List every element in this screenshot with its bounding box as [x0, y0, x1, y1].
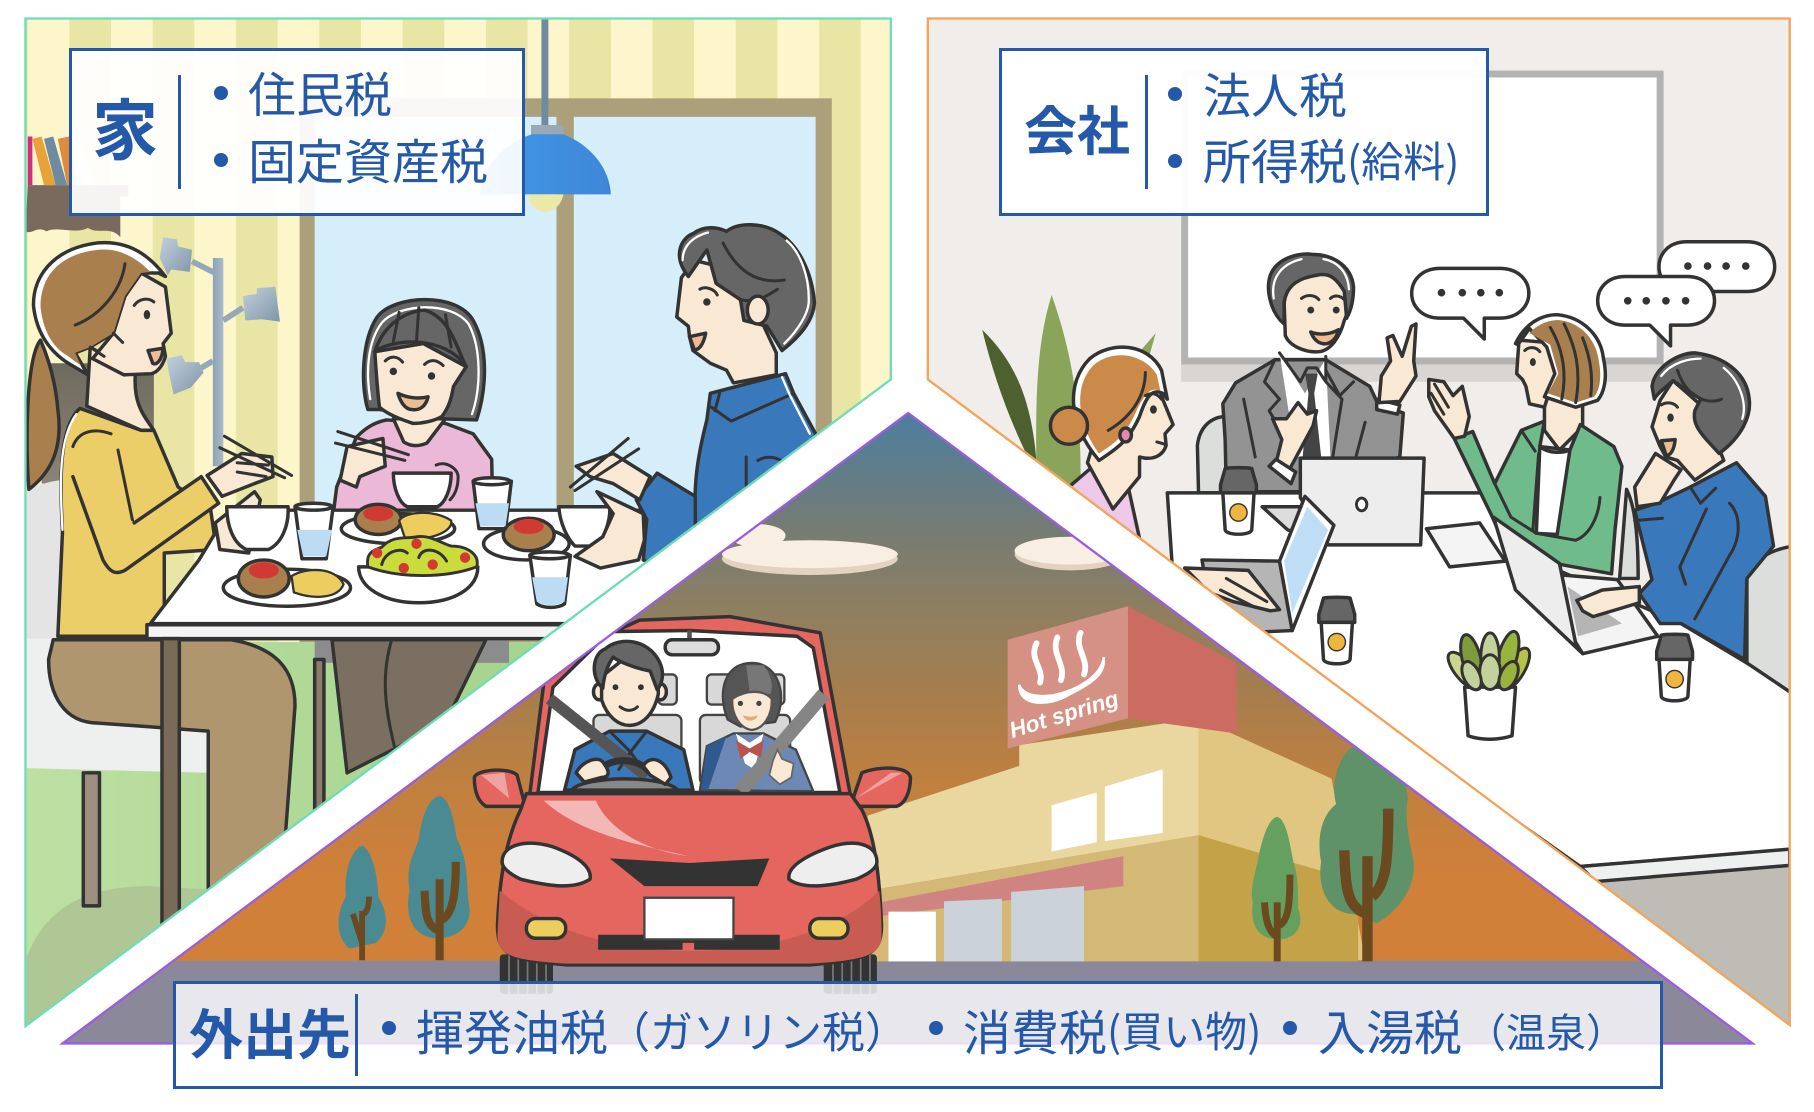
heading: company: 会社 — [1024, 90, 1130, 166]
coffee cup: center — [1319, 597, 1355, 664]
person: man in blue — [1635, 353, 1793, 694]
bullet — [214, 86, 228, 100]
small table plant — [1443, 629, 1535, 739]
car cabin — [530, 617, 850, 795]
tax note: (給料) — [1347, 129, 1459, 190]
tax item: 固定資産税 — [248, 123, 488, 193]
coffee cup: right — [1657, 634, 1693, 701]
divider — [355, 994, 358, 1076]
bullet — [1168, 87, 1182, 101]
driver — [550, 641, 693, 790]
label box: outing — [173, 981, 1663, 1089]
tax list: company — [1168, 57, 1459, 193]
lower body shade — [497, 891, 882, 964]
panel: outing — [58, 413, 1758, 1044]
father's lower hand — [575, 492, 644, 568]
floor lamp — [160, 237, 280, 466]
bookcase behind mother — [42, 363, 154, 484]
hot spring building — [868, 718, 1365, 961]
person: woman in green — [1429, 315, 1622, 574]
panel: office — [928, 19, 1799, 1030]
headlights — [502, 843, 877, 886]
paper notebook — [1426, 523, 1505, 567]
window — [300, 98, 832, 642]
hood highlight — [544, 801, 688, 856]
car — [474, 617, 910, 994]
car body — [497, 794, 882, 965]
tax note: （温泉） — [1466, 1001, 1626, 1059]
bullet — [214, 153, 228, 167]
person: child — [333, 300, 493, 515]
wall shelf with books — [25, 137, 128, 237]
panel border: outing — [62, 413, 1753, 1044]
bullet — [1168, 154, 1182, 168]
car wheels — [500, 954, 877, 994]
whiteboard — [1181, 74, 1664, 382]
tax item: 揮発油税 — [416, 994, 608, 1064]
sky gradient — [175, 414, 1640, 961]
label box: company — [999, 48, 1489, 216]
laptop: right — [1494, 517, 1658, 654]
bullet — [929, 1021, 943, 1035]
panel border: office — [928, 19, 1790, 1025]
license plate — [644, 898, 733, 939]
grille — [610, 858, 769, 886]
divider — [178, 75, 181, 189]
tax item: 法人税 — [1203, 57, 1347, 127]
panel: home — [25, 19, 905, 1035]
tax item: 消費税 — [963, 994, 1107, 1064]
hot spring sign — [1006, 606, 1237, 749]
heading: home: 家 — [92, 78, 158, 174]
tax note: (買い物) — [1107, 999, 1261, 1060]
coffee cup: back left — [1221, 468, 1256, 534]
speech bubbles — [1412, 242, 1775, 346]
table — [145, 508, 644, 924]
bullet — [1283, 1021, 1297, 1035]
bullet — [382, 1021, 396, 1035]
tax note: （ガソリン税） — [607, 999, 908, 1061]
ground road — [58, 961, 1758, 1044]
person: mother arm — [73, 436, 292, 573]
floor — [26, 642, 538, 1024]
person: father — [570, 225, 816, 578]
potted plant behind — [982, 295, 1156, 486]
pendant lamp — [480, 19, 611, 212]
divider — [1145, 75, 1148, 189]
office wall — [929, 20, 1788, 606]
food on table — [223, 464, 610, 607]
laptop: front left — [1185, 496, 1334, 633]
chair: mother — [25, 480, 208, 906]
heading: outing: 外出先 — [189, 991, 351, 1070]
clouds — [722, 524, 1126, 575]
kid stool and legs — [315, 640, 509, 810]
car seats — [593, 674, 790, 784]
chairs behind right people — [1620, 489, 1638, 578]
passenger — [700, 663, 824, 791]
trees right — [1252, 740, 1414, 961]
label box: home — [69, 48, 525, 216]
hot spring sign: Hot spring — [1006, 686, 1122, 743]
bumper bar — [598, 935, 780, 950]
tax item: 入湯税 — [1318, 994, 1462, 1064]
tax item: 所得税 — [1203, 123, 1347, 193]
meeting table — [1167, 493, 1799, 882]
person: mother body — [27, 243, 295, 926]
car mirrors — [474, 768, 910, 806]
person: boss — [1197, 254, 1416, 493]
tax list: outing — [382, 994, 1626, 1064]
panel border: home — [25, 19, 891, 1026]
fog lamps — [526, 919, 848, 938]
tax list: home — [214, 56, 488, 193]
floor — [1595, 865, 1790, 1030]
wallpaper stripes — [25, 19, 891, 666]
rearview mirror — [665, 631, 718, 655]
tax item: 住民税 — [248, 56, 392, 126]
person: woman left — [1050, 347, 1173, 550]
trees left — [338, 796, 470, 960]
laptop: back — [1262, 458, 1424, 545]
